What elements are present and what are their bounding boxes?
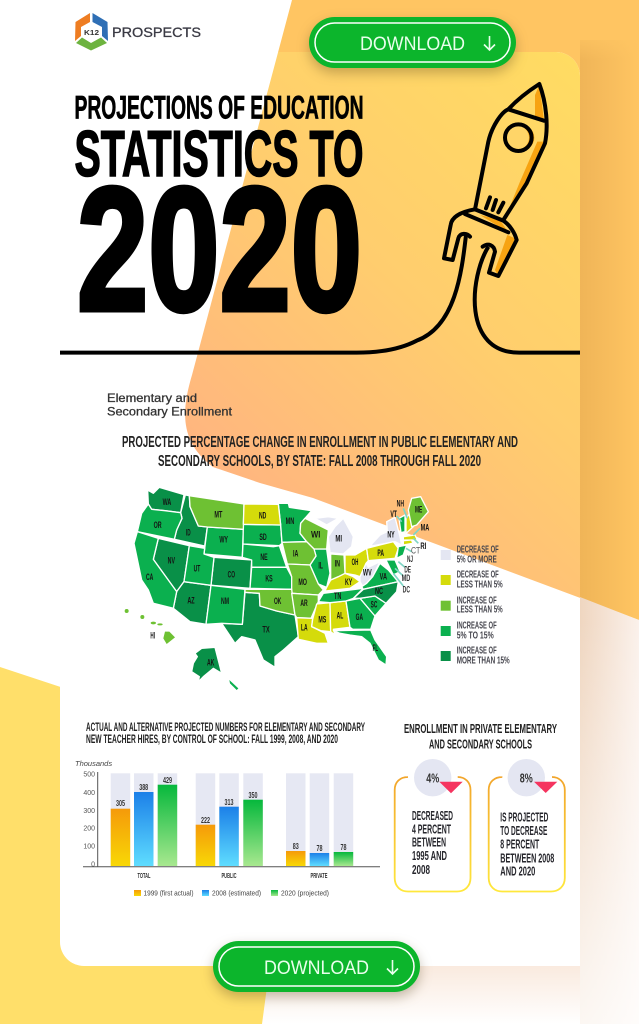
map state labels: west [146,497,308,668]
map state labels: west: MN [286,516,294,526]
choropleth map: eastern states [312,497,428,665]
bar chart: 78 [340,843,347,852]
download button bottom [213,941,420,992]
bar chart legend [134,890,329,898]
map state labels: west: LA [301,623,308,633]
map state labels: east: NC [375,586,383,596]
title: STATISTICS TO [74,117,364,190]
map state labels: west: IA [293,549,299,559]
map state labels: east: SC [371,599,378,609]
map state labels: east: GA [356,612,363,622]
bar chart: PUBLIC [222,871,237,880]
map state labels: west: WA [163,497,172,507]
bar chart legend: 2020 (projected) [281,890,329,898]
private enrollment heading [404,721,557,752]
bar chart: 300 [83,808,95,815]
logo: K12 Prospects: PROSPECTS [112,24,201,40]
logo: K12 Prospects: K12 [84,30,99,37]
logo: K12 Prospects [75,13,201,50]
bar chart: 305 [116,799,125,808]
map state labels: west: AZ [187,595,195,605]
map state labels: west: AR [300,598,308,608]
map state labels: west: MO [298,577,307,587]
bar chart title: ACTUAL AND ALTERNATIVE PROJECTED NUMBERS FOR ELEMENTARY AND SECONDARY [86,720,365,734]
bar chart legend: 2008 (estimated) [212,890,261,898]
map state labels: east: WI [311,530,320,540]
map state labels: west: CA [146,572,154,582]
map legend: LESS THAN 5% [457,604,503,616]
callout: 8 percent [489,759,565,892]
map state labels: west: MT [214,509,223,519]
callout: 8 percent: BETWEEN 2008 [500,851,554,865]
map state labels: east: CT [411,545,421,555]
bar chart: 78 [316,844,323,853]
map state labels: east: NH [397,498,404,508]
map state labels: east: DC [403,584,410,594]
map state labels: west: TX [262,624,270,634]
title: 2020 [77,152,362,348]
map legend: 5% TO 15% [457,629,494,641]
callout: 8 percent: IS PROJECTED [500,811,548,825]
map legend: INCREASE OF [457,619,497,631]
bar chart: 500 [83,772,95,778]
callout: 8 percent: AND 2020 [500,865,535,879]
section heading: Elementary and [107,391,197,405]
private enrollment heading: AND SECONDARY SCHOOLS [429,736,532,752]
map title [122,434,518,470]
bar chart: 200 [83,826,95,832]
bar chart: 0 [91,862,95,868]
map state labels: east: MA [421,522,430,532]
download button bottom: DOWNLOAD [264,958,369,979]
bar chart: 313 [224,798,234,807]
callout: 4 percent: 2008 [412,863,430,877]
map legend [441,544,510,666]
map state labels: west: ID [186,528,191,538]
map state labels: west: AK [207,658,215,668]
map state labels: east: MD [402,573,411,583]
map state labels: east: FL [373,643,378,653]
callout: 4 percent: 4% [426,770,439,786]
map legend: DECREASE OF [457,569,499,581]
section heading [107,391,233,418]
bar chart title: NEW TEACHER HIRES, BY CONTROL OF SCHOOL: FALL 1999, 2008, AND 2020 [86,732,338,746]
map legend: INCREASE OF [457,644,497,656]
bar chart: TOTAL [138,871,151,880]
map state labels: west: UT [194,564,201,574]
map state labels: east: ME [415,505,422,515]
bar chart: 83 [293,842,299,851]
bar chart: Thousands [75,759,112,768]
title: PROJECTIONS OF EDUCATION [74,90,364,126]
map state labels: west: CO [228,569,235,579]
download button top [309,17,516,68]
map legend: INCREASE OF [457,594,497,606]
map state labels: east: NJ [407,554,413,564]
map state labels: east: RI [420,541,426,551]
bar chart: PRIVATE [310,871,328,880]
bar chart: 400 [83,790,95,797]
map state labels: east: OH [352,557,358,567]
map state labels: west: OR [154,520,162,530]
callout: 4 percent: DECREASED [412,809,453,823]
callout: 4 percent: 1995 AND [412,849,447,863]
map state labels: west: NV [168,555,175,565]
map state labels: east: KY [345,577,352,587]
map state labels: east: DE [404,565,411,575]
map state labels: west: WY [219,535,228,545]
map state labels: east: VA [380,571,387,581]
map state labels: east: IL [318,560,323,570]
map state labels: east [311,498,430,653]
map state labels: east: VT [390,509,397,519]
download button top: DOWNLOAD [360,34,465,55]
map legend: 5% OR MORE [457,553,497,565]
icon: rocket with trail [60,84,580,353]
map state labels: east: TN [334,591,341,601]
map legend: DECREASE OF [457,544,499,556]
callout: 8 percent: 8 PERCENT [500,837,540,851]
callout: 4 percent: 4 PERCENT [412,822,451,836]
card panel [60,52,580,966]
map state labels: east: WV [363,568,372,578]
map state labels: east: IN [335,559,340,569]
map legend: MORE THAN 15% [457,654,510,666]
map state labels: west: OK [274,596,282,606]
map state labels: east: MS [318,615,326,625]
callout: 8 percent: TO DECREASE [500,824,547,838]
bar chart legend: 1999 (first actual) [144,890,194,898]
map state labels: west: ND [259,510,267,520]
map state labels: east: AL [337,610,344,620]
bar chart: 350 [248,791,258,800]
bar chart: 429 [163,776,172,785]
callout: 4 percent: BETWEEN [412,836,446,850]
callout: 8 percent: 8% [520,770,533,786]
map state labels: west: NE [260,552,268,562]
map state labels: east: NY [387,530,395,540]
title [74,90,364,348]
bar chart [75,759,380,898]
map state labels: east: MI [335,534,342,544]
bar chart: 100 [83,844,95,850]
section heading: Secondary Enrollment [107,404,233,418]
choropleth map: western states [125,487,330,690]
map state labels: west: KS [265,574,273,584]
map state labels: east: PA [377,548,384,558]
callout: 4 percent [395,759,470,892]
map state labels: west: SD [259,532,267,542]
bar chart: 222 [201,816,210,825]
bar chart title [86,720,365,746]
bar chart: 388 [139,783,149,792]
map state labels: west: NM [221,596,229,606]
map state labels: west: HI [150,630,155,640]
map legend: LESS THAN 5% [457,578,503,590]
